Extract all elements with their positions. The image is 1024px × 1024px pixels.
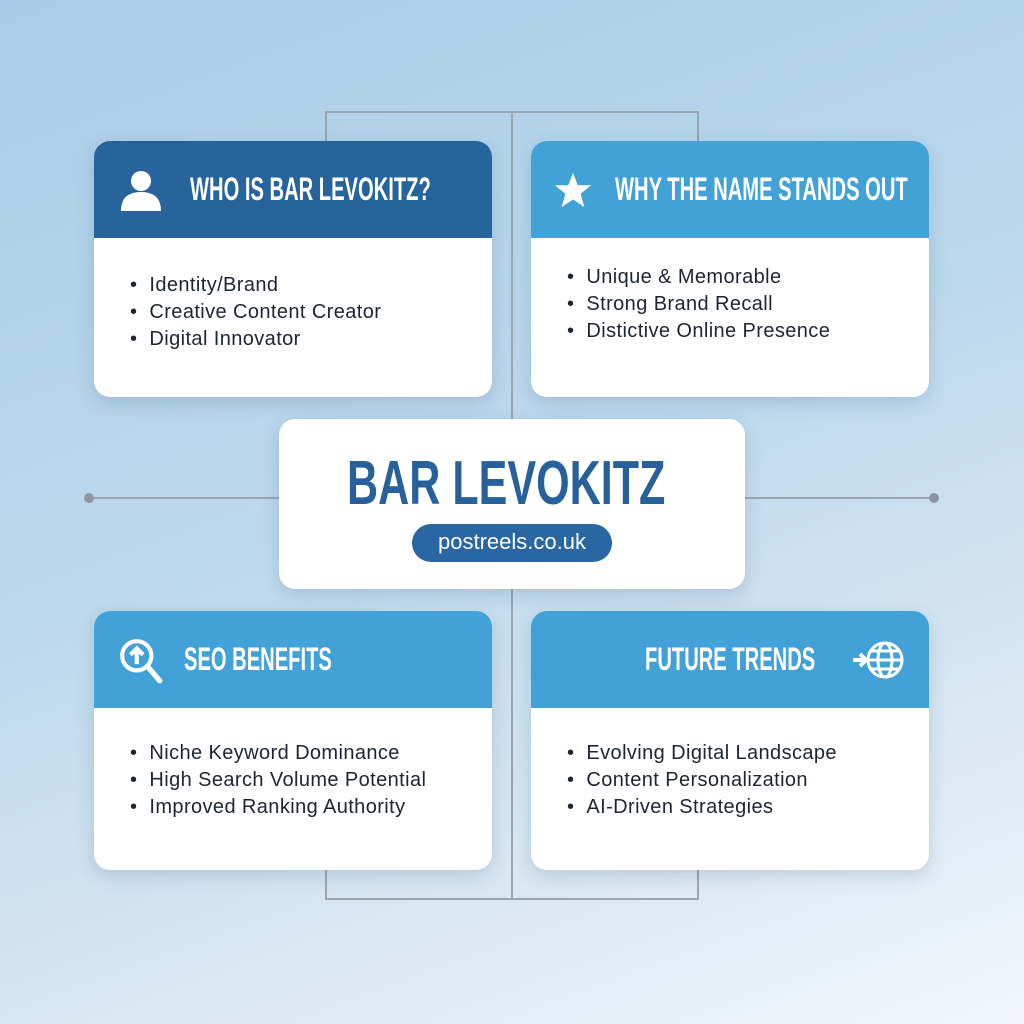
header	[94, 611, 492, 708]
connector lines	[84, 111, 939, 900]
center title box	[279, 419, 745, 589]
panel: future	[531, 611, 929, 870]
list	[130, 742, 426, 818]
list: Strong Brand Recall	[586, 293, 773, 315]
panel: seo	[94, 611, 492, 870]
list	[568, 742, 837, 818]
list: Unique & Memorable	[586, 266, 781, 288]
list	[568, 266, 830, 342]
panel: why name	[531, 141, 929, 397]
header	[531, 611, 929, 708]
icon: person	[121, 171, 161, 211]
header: WHY THE NAME STANDS OUT	[615, 171, 908, 207]
panel: who is	[94, 141, 492, 397]
header	[531, 141, 929, 238]
list: Digital Innovator	[149, 328, 301, 350]
list: Identity/Brand	[149, 274, 278, 296]
url pill: postreels.co.uk	[438, 529, 586, 554]
title: BAR LEVOKITZ	[347, 449, 665, 518]
icon: star	[555, 173, 591, 207]
icon: globe arrow	[853, 642, 904, 678]
list: Evolving Digital Landscape	[586, 742, 837, 764]
list	[130, 274, 381, 350]
list: Niche Keyword Dominance	[149, 742, 400, 764]
list: Improved Ranking Authority	[149, 796, 406, 818]
list: Creative Content Creator	[149, 301, 381, 323]
list: High Search Volume Potential	[149, 769, 426, 791]
list: AI-Driven Strategies	[586, 796, 773, 818]
header: who is	[94, 141, 492, 238]
icon: magnifier	[120, 639, 162, 684]
header: SEO BENEFITS	[184, 641, 332, 677]
header: FUTURE TRENDS	[645, 641, 815, 677]
url pill	[412, 524, 612, 562]
list: Distictive Online Presence	[586, 320, 830, 342]
header: who is: WHO IS BAR LEVOKITZ?	[190, 171, 431, 207]
list: Content Personalization	[586, 769, 808, 791]
